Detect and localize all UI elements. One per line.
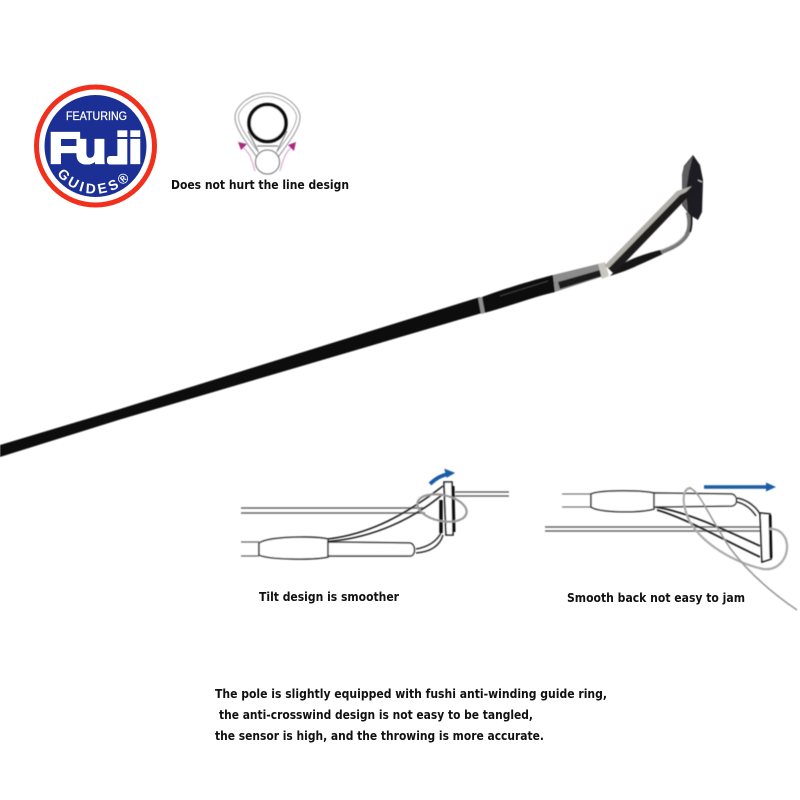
logo: Fuji Guides badge: FEATURING bbox=[66, 111, 127, 123]
caption: tilt design: Tilt design is smoother bbox=[259, 590, 399, 604]
caption: smooth back: Smooth back not easy to jam bbox=[567, 591, 745, 605]
description text block: the anti-crosswind design is not easy to be tangled, bbox=[219, 708, 533, 722]
fishing rod with guide bbox=[0, 155, 703, 457]
logo: Fuji Guides badge: GUIDES® bbox=[58, 170, 128, 194]
icon: guide ring front view bbox=[235, 93, 300, 174]
description text block: The pole is slightly equipped with fushi anti-winding guide ring, bbox=[215, 687, 607, 701]
description text block: the sensor is high, and the throwing is more accurate. bbox=[215, 729, 544, 743]
description text block bbox=[215, 687, 607, 743]
logo: Fuji Guides badge: Fuji bbox=[48, 124, 143, 173]
diagram: smooth back guide bbox=[545, 482, 797, 610]
caption: does not hurt the line: Does not hurt the line design bbox=[171, 178, 349, 192]
diagram: tilt guide bbox=[241, 470, 509, 559]
logo: Fuji Guides badge bbox=[34, 84, 157, 208]
